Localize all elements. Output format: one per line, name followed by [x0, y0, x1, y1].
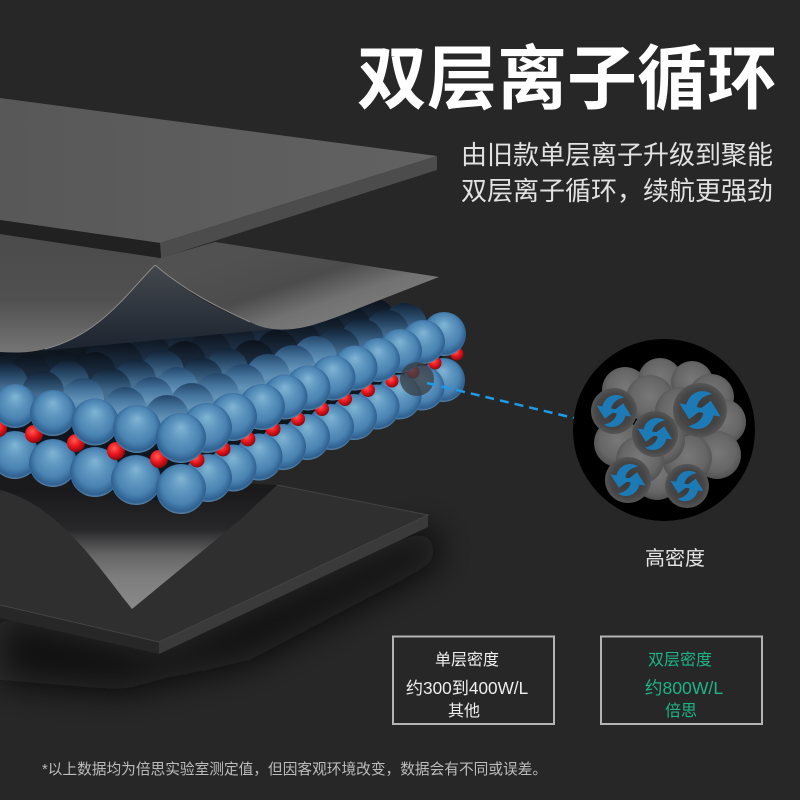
bottom ball layer [0, 358, 465, 514]
dark backing behind balls [0, 305, 450, 505]
title: 双层离子循环 [357, 40, 777, 118]
box: double layer density: 约800W/L [645, 678, 723, 698]
interior ball rows [0, 299, 427, 439]
box: single layer density: 约300到400W/L [406, 678, 528, 698]
top ball layer [0, 312, 466, 463]
subtitle: 双层离子循环，续航更强劲 [461, 176, 773, 206]
subtitle: 由旧款单层离子升级到聚能 [461, 140, 773, 170]
footnote: *以上数据均为倍思实验室测定值，但因客观环境改变，数据会有不同或误差。 [42, 760, 547, 778]
gray spheres [594, 358, 746, 500]
dark underside flap [40, 265, 275, 351]
magnifier spot [400, 362, 434, 396]
label: high density: 高密度 [645, 547, 705, 570]
subtitle [461, 140, 773, 206]
high-density circle illustration [573, 339, 755, 521]
red ions [0, 348, 464, 468]
middle sheet [0, 234, 439, 353]
balls: ion layers [0, 299, 466, 514]
box: double layer density: 倍思 [665, 702, 697, 720]
top plate [0, 98, 437, 258]
dashed leader line [427, 383, 574, 418]
lower sheet flap [0, 470, 277, 609]
box: single layer density [393, 636, 554, 724]
sync arrows [594, 388, 724, 504]
sync spheres [591, 383, 727, 508]
box: single layer density: 单层密度 [435, 651, 499, 669]
box: double layer density: 双层密度 [648, 651, 712, 669]
box: double layer density [601, 636, 762, 724]
box: single layer density: 其他 [448, 702, 480, 720]
bottom plate [0, 470, 440, 690]
